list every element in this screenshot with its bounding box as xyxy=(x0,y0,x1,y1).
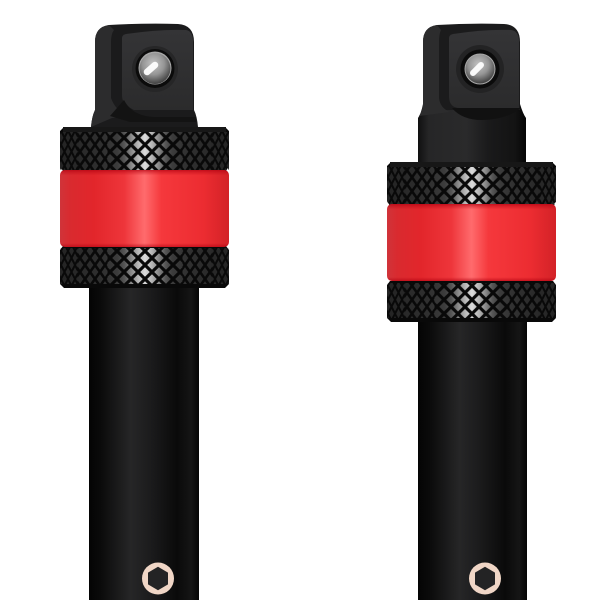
right shaft xyxy=(418,315,527,600)
left red collar xyxy=(60,170,229,247)
right lower knurled ring xyxy=(387,281,556,322)
left shaft xyxy=(89,280,199,600)
right hex hole xyxy=(469,562,501,594)
left hex hole xyxy=(142,562,174,594)
left square drive head xyxy=(91,24,198,127)
right neck xyxy=(418,104,526,164)
tool: right extension bar xyxy=(387,24,557,600)
left upper knurled ring xyxy=(60,127,229,171)
left detent ball xyxy=(132,46,178,92)
left lower knurled ring xyxy=(60,246,229,288)
right red collar xyxy=(387,204,556,281)
tool: left extension bar xyxy=(60,24,230,600)
right upper knurled ring xyxy=(387,162,556,205)
right detent ball xyxy=(456,45,504,93)
right square drive head xyxy=(419,24,521,120)
illustration: two extension bars xyxy=(60,24,556,600)
